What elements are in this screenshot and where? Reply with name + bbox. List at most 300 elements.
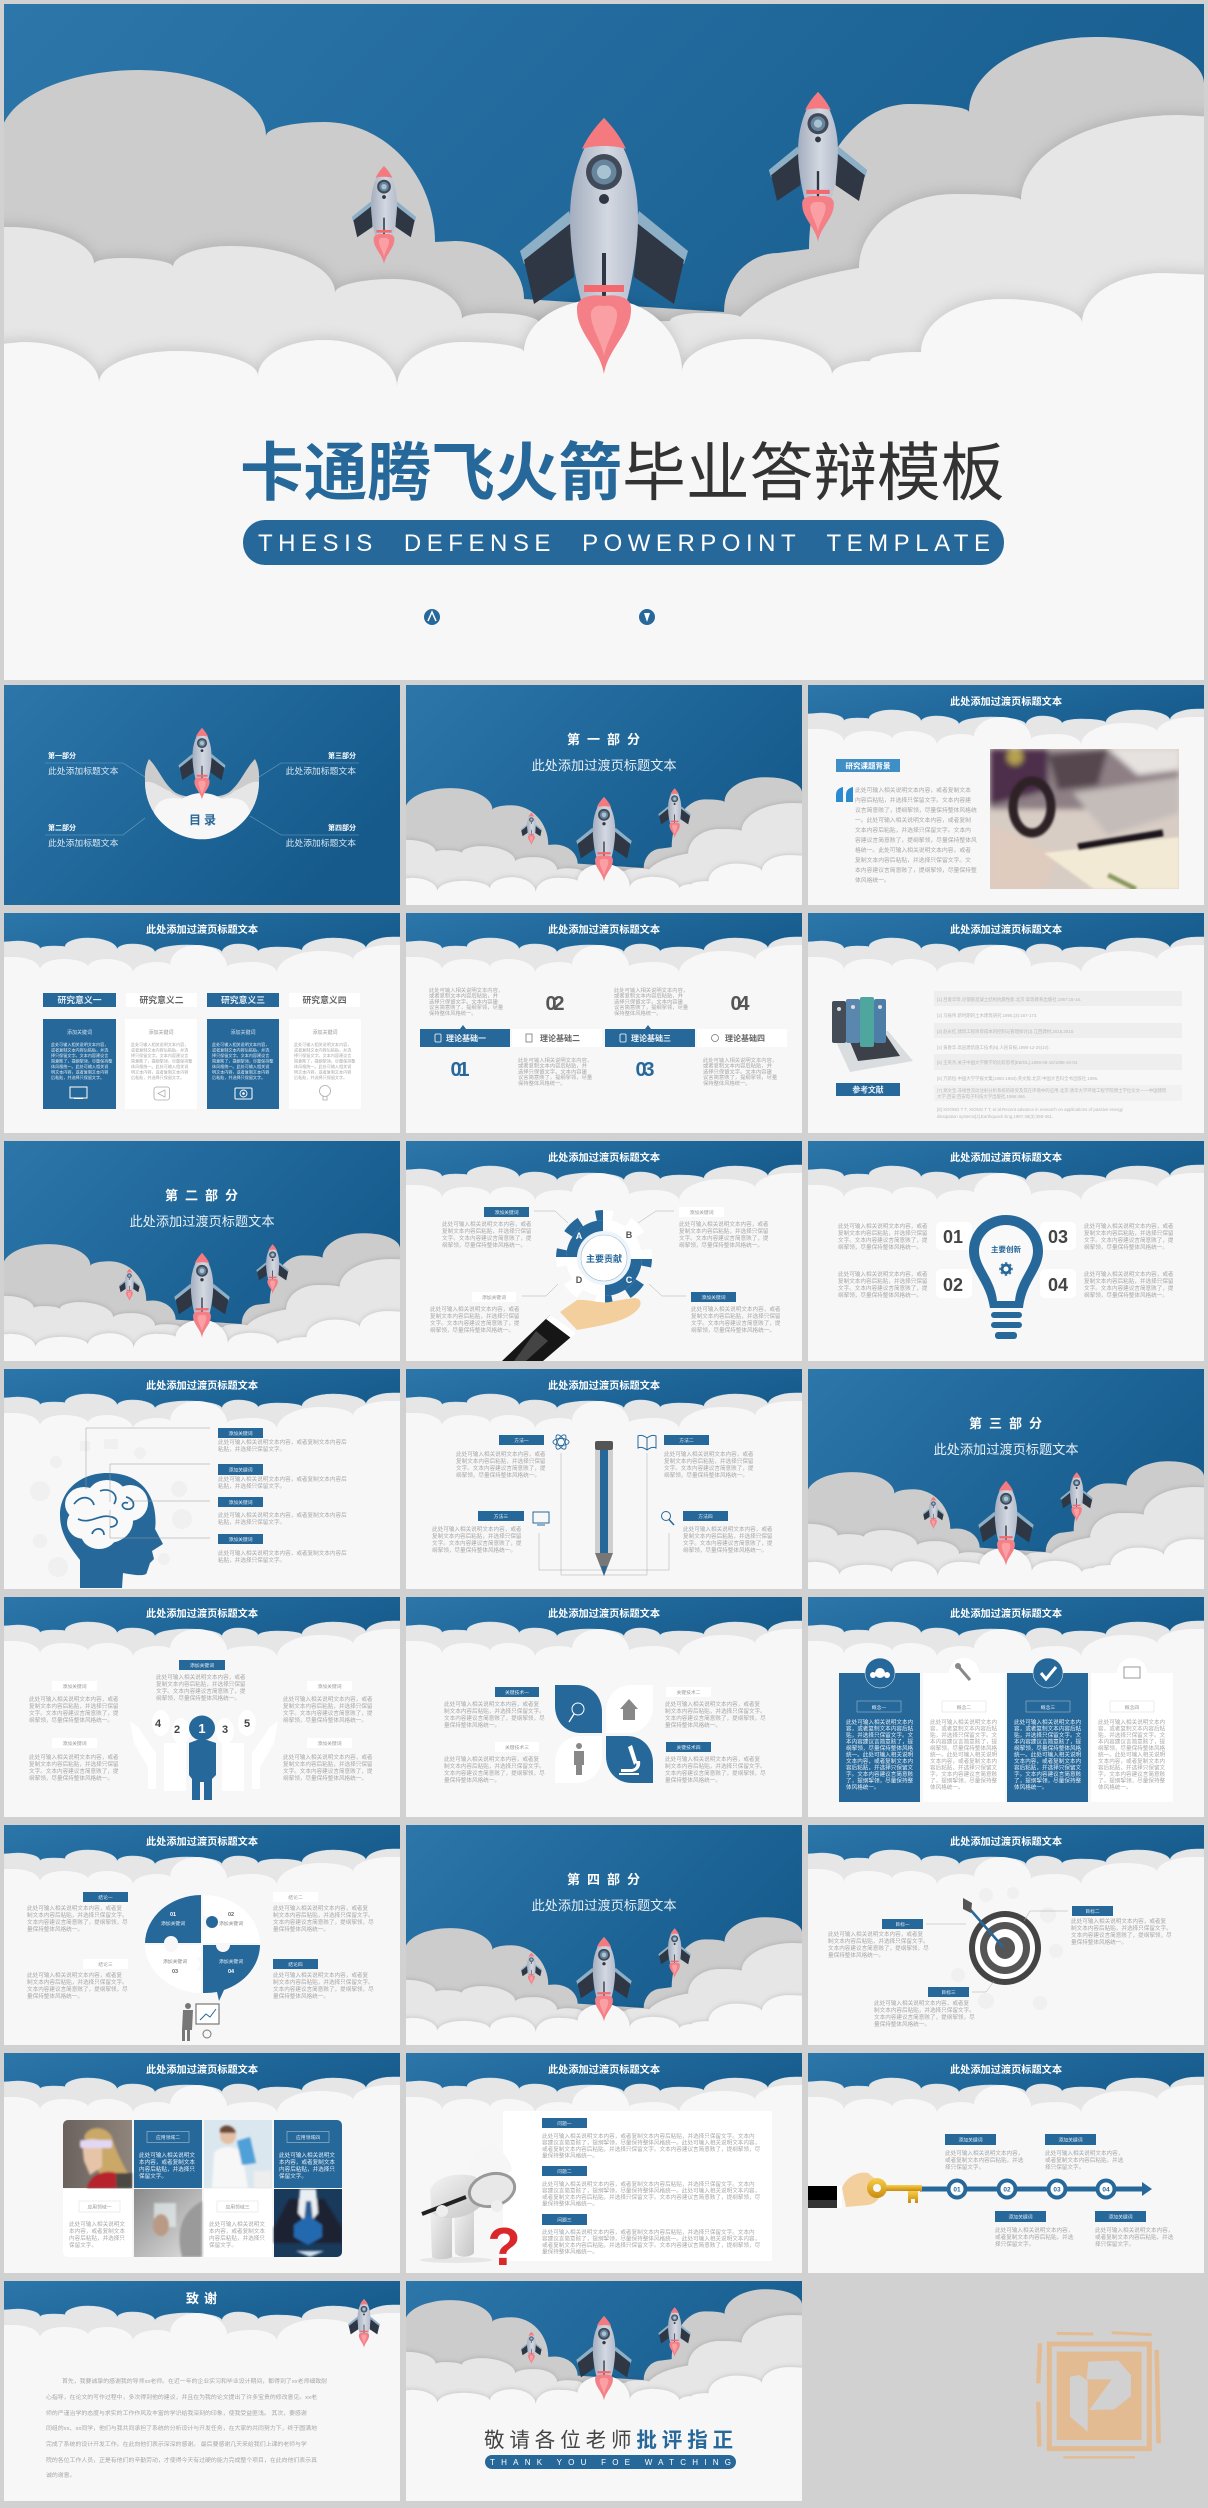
technology one: 量保持整体风格统一。 (444, 1721, 500, 1729)
panel: table of contents (4, 685, 400, 905)
card one: 体风格统一。此处可输入相关说 (51, 1063, 108, 1069)
conclusion two: 此处可输入相关说明文本内容，或者复 (273, 1904, 369, 1912)
method one: 方法一 (514, 1437, 529, 1444)
method four (683, 1511, 773, 1554)
cell: field four: 应用领域四 (296, 2134, 320, 2141)
timeline nodes: 04 (1102, 2186, 1110, 2194)
keyword two: 此处可输入相关说明文本内容， (995, 2226, 1073, 2234)
photo: woman with headset (63, 2120, 132, 2188)
numbers: 01 (943, 1227, 963, 1247)
keyword two: 或者复制文本内容后粘贴，并选 (995, 2233, 1074, 2241)
card one: 容，或者复制文本内容后粘 (846, 1724, 914, 1732)
conclusion one: 此处可输入相关说明文本内容，或者复 (27, 1904, 123, 1912)
number 01: 01 (450, 1059, 470, 1081)
method three: 复制文本内容后粘贴，并选择只保留 (432, 1532, 522, 1540)
card one: 贴，并选择只保留文字。文 (846, 1731, 914, 1739)
thank you paragraph: 诚的谢意。 (46, 2471, 75, 2479)
card one: 简意赅了，提纲挈领，尽量保持整 (51, 1058, 112, 1064)
keyword one: 添加关键词 (958, 2136, 983, 2144)
card four: 体风格统一。 (1098, 1783, 1132, 1791)
card three: 后粘贴，并选择只保留文字。 (212, 1074, 265, 1080)
number tiles (936, 1222, 1076, 1298)
method one (456, 1435, 546, 1479)
card two: 字。文本内容建议言简意赅 (930, 1770, 998, 1778)
technology one: 文本内容建议言简意赅了，提纲挈领，尽 (444, 1714, 545, 1722)
card two: 概念二 (957, 1704, 971, 1711)
icon: magnifier (662, 1512, 674, 1525)
keyword three (1045, 2134, 1124, 2171)
item three (218, 1497, 347, 1526)
card three: 文本内容，或者复制文本内 (1014, 1757, 1082, 1765)
conclusion three: 此处可输入相关说明文本内容，或者复 (27, 1971, 123, 1979)
method three: 方法三 (494, 1513, 508, 1520)
cell: field four: 此处可输入相关说明文 (279, 2151, 335, 2159)
card three (1007, 1658, 1088, 1802)
icon: book (638, 1435, 656, 1450)
keyword C with text: 纲挈领，尽量保持整体风格统一。 (691, 1326, 775, 1334)
petal top right (606, 1685, 653, 1733)
cell: field three (204, 2189, 272, 2257)
technology three (444, 1742, 545, 1784)
tab one: 研究意义一 (58, 994, 102, 1005)
right keyword top: 此处可输入相关说明文本内容，或者 (283, 1695, 373, 1703)
centre keyword: 纲挈领，尽量保持整体风格统一。 (156, 1694, 240, 1702)
heading: 此处添加过渡页标题文本 (548, 1607, 660, 1620)
reference list: [4] 黄春华.高层建筑施工技术[N].人民日报,1998-12-25(10). (937, 1044, 1050, 1051)
photo: scientist (204, 2120, 272, 2188)
section heading: 第一部分 (567, 732, 647, 747)
item four: 粘贴，并选择只保留文字。 (218, 1556, 285, 1564)
method two: 方法二 (679, 1437, 694, 1444)
question three: 容建议言简意赅了，提纲挈领，尽量保持整体风格统一。此处可输入相关说明文本内容， (542, 2234, 760, 2242)
card three: 添加关键词 (230, 1029, 256, 1036)
right keyword bottom: 复制文本内容后粘贴，并选择只保留 (283, 1760, 373, 1768)
card two: 明文本内容，或者复制文本内容 (131, 1068, 188, 1074)
illustration: binders on a laptop (832, 997, 913, 1072)
method three: 此处可输入相关说明文本内容，或者 (432, 1525, 522, 1533)
question mark: ? (488, 2217, 520, 2277)
timeline nodes: 01 (953, 2186, 961, 2194)
left keyword bottom (29, 1738, 119, 1782)
card two: 了，提纲挈领，尽量保持整 (930, 1776, 998, 1784)
card three: 字。文本内容建议言简意赅 (1014, 1770, 1082, 1778)
goal one: 量保持整体风格统一。 (828, 1951, 884, 1959)
heading: 此处添加过渡页标题文本 (548, 923, 660, 936)
closing message: 敬请各位老师批评指正 (484, 2429, 738, 2452)
keyword D with text: 文字。文本内容建议言简意赅了，提 (430, 1319, 520, 1327)
white figure with magnifier (420, 2145, 518, 2263)
card two: 文本内容，或者复制文本内 (930, 1757, 998, 1765)
item two (45, 818, 145, 848)
goal three: 此处可输入相关说明文本内容，或者复 (874, 1999, 970, 2007)
pencil (595, 1441, 613, 1576)
panel: concept cards (808, 1597, 1204, 1817)
numbers: 03 (1048, 1227, 1068, 1247)
question two: 或者复制文本内容后粘贴，并选择只保留文字。文本内容建议言简意赅了，提纲挈领，尽 (542, 2193, 761, 2201)
item four: 第四部分 (328, 823, 356, 832)
conclusion four: 制文本内容后粘贴，并选择只保留文字。 (273, 1978, 374, 1986)
figure numbers: 5 (244, 1718, 250, 1730)
goal three: 目标三 (941, 1989, 956, 1996)
card four: 统一。此处可输入相关说明 (1098, 1750, 1166, 1758)
method four: 此处可输入相关说明文本内容，或者 (683, 1525, 773, 1533)
method two: 文字。文本内容建议言简意赅了，提 (664, 1464, 754, 1472)
brain (65, 1480, 148, 1549)
label: 参考文献 (852, 1084, 884, 1094)
card four: 明文本内容，或者复制文本内容 (294, 1068, 351, 1074)
target (969, 1911, 1041, 1985)
gear diagram (556, 1210, 652, 1302)
keyword one: 择只保留文字。 (945, 2163, 984, 2171)
light bulb (969, 1215, 1043, 1339)
item one: 添加关键词 (228, 1430, 253, 1437)
text bottom right: 保持整体风格统一。 (703, 1079, 751, 1087)
arrow timeline (920, 2182, 1152, 2196)
conclusion one: 制文本内容后粘贴，并选择只保留文字。 (27, 1911, 128, 1919)
goal one: 目标一 (895, 1921, 910, 1928)
cell: field one (69, 2189, 132, 2248)
card four: 或者复制文本内容后粘贴，并选 (294, 1046, 351, 1052)
card two (125, 1019, 197, 1109)
hand with golden key (808, 2173, 922, 2208)
step one: 理论基础一 (446, 1033, 486, 1043)
step three (605, 1025, 695, 1047)
section heading: 第二部分 (165, 1188, 245, 1203)
method one: 此处可输入相关说明文本内容，或者 (456, 1450, 546, 1458)
reference list: [8] SOONG T T, XIONG T T, et al.Recent advance in research on applications of passive energy (937, 1107, 1124, 1112)
number 03: 03 (636, 1059, 654, 1081)
text three: 文字。文本内容建议言简意赅了，提 (1084, 1236, 1174, 1244)
technology two: 制文本内容后粘贴，并选择只保留文字。 (665, 1707, 766, 1715)
card two: 本内容建议言简意赅了，提 (930, 1738, 998, 1746)
cell: field three: 内容后粘贴，并选择只 (209, 2234, 265, 2242)
quote mark (836, 787, 853, 802)
item four: 添加关键词 (228, 1536, 253, 1543)
keyword A with text: 纲挈领，尽量保持整体风格统一。 (442, 1241, 526, 1249)
keyword D with text: 纲挈领，尽量保持整体风格统一。 (430, 1326, 514, 1334)
card three: 此处可输入相关说明文本内 (1014, 1718, 1082, 1726)
petal top left (555, 1685, 602, 1733)
item three: 第三部分 (328, 751, 356, 760)
item one: 此处添加标题文本 (48, 765, 119, 776)
paragraph: 复制文本内容后粘贴，并选择只保留文字。文 (855, 856, 971, 864)
centre keyword: 复制文本内容后粘贴，并选择只保留 (156, 1680, 246, 1688)
text four: 文字。文本内容建议言简意赅了，提 (1084, 1284, 1174, 1292)
brain folds (74, 1490, 134, 1535)
card one: 字。文本内容建议言简意赅 (846, 1770, 914, 1778)
cell: field three: 本内容，或者复制文本 (209, 2227, 265, 2235)
conclusion four: 结论四 (288, 1961, 303, 1968)
petal bottom right (606, 1736, 653, 1783)
goal two: 此处可输入相关说明文本内容，或者复 (1071, 1917, 1167, 1925)
keyword two: 添加关键词 (1008, 2214, 1033, 2220)
cell: field two (134, 2120, 202, 2188)
numbers: 02 (943, 1275, 963, 1295)
card four: 添加关键词 (312, 1029, 338, 1036)
technology one: 此处可输入相关说明文本内容，或者复 (444, 1700, 540, 1708)
card four: 文本内容，或者复制文本内 (1098, 1757, 1166, 1765)
label (836, 1083, 900, 1096)
card one: 择只保留文字。文本内容建议言 (51, 1052, 108, 1058)
card one: 文本内容，或者复制文本内 (846, 1757, 914, 1765)
left keyword top: 添加关键词 (62, 1683, 87, 1690)
card three: 容，或者复制文本内容后粘 (1014, 1724, 1082, 1732)
method three: 文字。文本内容建议言简意赅了，提 (432, 1539, 522, 1547)
keyword A with text: 此处可输入相关说明文本内容，或者 (442, 1220, 532, 1228)
section heading: 第四部分 (567, 1872, 647, 1887)
group of people figures (130, 1710, 278, 1791)
centre keyword: 添加关键词 (190, 1662, 214, 1669)
puzzle labels: 添加关键词 (219, 1920, 243, 1927)
card four: 此处可输入相关说明文本内容， (294, 1041, 351, 1047)
puzzle labels: 添加关键词 (161, 1920, 185, 1927)
item one: 此处可输入相关说明文本内容，或者复制文本内容后 (218, 1438, 347, 1446)
panel: section four (406, 1825, 802, 2045)
card three: 本内容建议言简意赅了，提 (1014, 1738, 1082, 1746)
faint background icons (951, 1887, 1063, 2010)
text bottom left: 或者复制文本内容后粘贴，并 (518, 1062, 588, 1070)
text four: 纲挈领，尽量保持整体风格统一。 (1084, 1291, 1168, 1299)
card three (207, 1019, 279, 1109)
cell: field two: 此处可输入相关说明文 (139, 2151, 195, 2159)
label (836, 759, 900, 772)
conclusion three: 结论三 (98, 1961, 113, 1968)
goal two: 目标二 (1085, 1908, 1100, 1915)
card two: 简意赅了，提纲挈领，尽量保持整 (131, 1058, 192, 1064)
method one: 复制文本内容后粘贴，并选择只保留 (456, 1457, 546, 1465)
right keyword top: 复制文本内容后粘贴，并选择只保留 (283, 1702, 373, 1710)
reference list: 大学,西安:西安电子科技大学出版社,1996:466. (937, 1093, 1026, 1100)
card one: 概念一 (872, 1704, 886, 1711)
heading: 此处添加过渡页标题文本 (548, 1151, 660, 1164)
puzzle labels: 添加关键词 (219, 1958, 243, 1965)
question three: 此处可输入相关说明文本内容，或者复制文本内容后粘贴，并选择只保留文字。文本内 (542, 2228, 755, 2236)
technology three: 量保持整体风格统一。 (444, 1776, 500, 1784)
keyword C with text (649, 1284, 781, 1334)
card four: 本内容建议言简意赅了，提 (1098, 1738, 1166, 1746)
watermark stamp (1038, 2333, 1159, 2457)
numbers (943, 1227, 1068, 1295)
thank you paragraph: 完成了系统的设计开发工作。在此向他们表示深深的感谢。 最后要感谢几天来给我们上课的老师与学 (46, 2440, 307, 2448)
keyword three: 或者复制文本内容后粘贴，并选 (1045, 2156, 1124, 2164)
centre keyword: 文字。文本内容建议言简意赅了，提 (156, 1687, 246, 1695)
technology four: 关键技术四 (676, 1744, 701, 1751)
text top left: 保持整体风格统一。 (429, 1009, 477, 1017)
text bottom left: 保持整体风格统一。 (518, 1079, 566, 1087)
thank you paragraph: 心指导，在论文的写作过程中，多次得到他的建议，并且在为我的论文提出了许多宝贵的修改意见。xx老 (46, 2393, 317, 2401)
card four (1091, 1658, 1173, 1802)
presenter with chart (182, 2003, 219, 2041)
conclusion two: 量保持整体风格统一。 (273, 1925, 329, 1933)
keyword C with text: 文字。文本内容建议言简意赅了，提 (691, 1319, 781, 1327)
card three: 纲挈领，尽量保持整体风格 (1014, 1744, 1082, 1752)
tab four: 研究意义四 (302, 994, 347, 1005)
icon: advisor badge (639, 609, 655, 625)
subtitle pill: THESIS DEFENSE POWERPOINT TEMPLATE (258, 530, 990, 557)
question one: 量保持整体风格统一。 (542, 2152, 598, 2160)
card four: 贴，并选择只保留文字。文 (1098, 1731, 1166, 1739)
puzzle labels: 03 (172, 1969, 178, 1975)
item three (259, 751, 359, 777)
conclusion two: 结论二 (288, 1894, 303, 1901)
icon: monitor (533, 1512, 549, 1525)
conclusion three: 文本内容建议言简意赅了，提纲挈领，尽 (27, 1985, 128, 1993)
card four: 容，或者复制文本内容后粘 (1098, 1724, 1166, 1732)
right keyword top: 纲挈领，尽量保持整体风格统一。 (283, 1716, 367, 1724)
lead figure (189, 1716, 216, 1800)
text four: 此处可输入相关说明文本内容，或者 (1084, 1270, 1174, 1278)
paragraph: 体风格统一。 (855, 876, 890, 884)
panel: section one (406, 685, 802, 905)
heading: 此处添加过渡页标题文本 (950, 923, 1062, 936)
card two: 此处可输入相关说明文本内 (930, 1718, 998, 1726)
goal two: 量保持整体风格统一。 (1071, 1938, 1127, 1946)
card two: 容后粘贴，并选择只保留文 (930, 1764, 998, 1772)
cell: field one: 保留文字。 (69, 2241, 97, 2249)
card two: 容，或者复制文本内容后粘 (930, 1724, 998, 1732)
puzzle labels: 02 (228, 1912, 234, 1918)
thanks pill: THANK YOU FOE WATCHING (490, 2458, 731, 2467)
paragraph: 容建议言简意赅了，提纲挈领，尽量保持整体风 (855, 836, 977, 844)
method two: 纲挈领，尽量保持整体风格统一。 (664, 1471, 748, 1479)
heading: 此处添加过渡页标题文本 (950, 2063, 1062, 2076)
heading: 致谢 (186, 2291, 222, 2306)
text four: 复制文本内容后粘贴，并选择只保留 (1084, 1277, 1174, 1285)
thank you paragraph: 师的严谨治学的态度与求实的工作作风及丰富的学识给我深刻的印象，使我受益匪浅。 其次，要感谢 (46, 2409, 307, 2417)
method four: 文字。文本内容建议言简意赅了，提 (683, 1539, 773, 1547)
left keyword top: 纲挈领，尽量保持整体风格统一。 (29, 1716, 113, 1724)
label: 研究课题背景 (846, 760, 891, 770)
card two: 体风格统一。 (930, 1783, 964, 1791)
reference list: dissipation systems[J].Earthquack Eng,1997,38(3):358-361. (937, 1114, 1053, 1119)
card three: 贴，并选择只保留文字。文 (1014, 1731, 1082, 1739)
panel: open questions (406, 2053, 802, 2277)
reference list (934, 991, 1182, 1119)
keyword D with text: 复制文本内容后粘贴，并选择只保留 (430, 1312, 520, 1320)
left keyword bottom: 复制文本内容后粘贴，并选择只保留 (29, 1760, 119, 1768)
conclusion four: 文本内容建议言简意赅了，提纲挈领，尽 (273, 1985, 374, 1993)
item one (218, 1428, 347, 1453)
figure numbers: 1 (198, 1721, 206, 1736)
keyword three: 择只保留文字。 (1045, 2163, 1084, 2171)
panel: goals target (808, 1825, 1204, 2045)
illustration: clouds and rockets (401, 1917, 805, 2156)
heading: 此处添加过渡页标题文本 (548, 1379, 660, 1392)
text three: 复制文本内容后粘贴，并选择只保留 (1084, 1229, 1174, 1237)
icon: gear (999, 1262, 1013, 1276)
step two: 理论基础二 (540, 1033, 580, 1043)
question one: 问题一 (557, 2120, 572, 2127)
goal three (874, 1981, 994, 2028)
card four: 字。文本内容建议言简意赅 (1098, 1770, 1166, 1778)
section heading: 第三部分 (969, 1416, 1049, 1431)
cell: field one: 此处可输入相关说明文 (69, 2220, 125, 2228)
timeline nodes: 02 (1003, 2186, 1011, 2194)
icon: atom (553, 1433, 569, 1451)
card four: 择只保留文字。文本内容建议言 (294, 1052, 351, 1058)
text top left: 选择只保留文字。文本内容建 (429, 997, 499, 1005)
keyword C with text: 复制文本内容后粘贴，并选择只保留 (691, 1312, 781, 1320)
cell: field two: 应用领域二 (156, 2134, 180, 2141)
panel: closing slide (406, 2281, 802, 2501)
heading: 此处添加过渡页标题文本 (548, 2063, 660, 2076)
item three: 此处添加标题文本 (286, 765, 356, 776)
text bottom right: 此处可输入相关说明文本内容， (703, 1056, 777, 1064)
right keyword top: 文字。文本内容建议言简意赅了，提 (283, 1709, 373, 1717)
card three: 容后粘贴，并选择只保留文 (1014, 1764, 1082, 1772)
right keyword top (283, 1681, 373, 1724)
question two (542, 2166, 761, 2208)
text top right: 议言简意赅了，提纲挈领，尽量 (614, 1003, 689, 1011)
technology four: 量保持整体风格统一。 (665, 1776, 721, 1784)
cell: field four: 内容后粘贴，并选择只 (279, 2165, 335, 2173)
text top right: 或者复制文本内容后粘贴，并 (614, 992, 684, 1000)
reference list: [7] 郑文宝.非线性流动注射分析系统的研究及其在环境中的应用.北京:清华大学环境工程学院博士学位论文——中国建筑 (937, 1087, 1167, 1094)
item three: 粘贴，并选择只保留文字。 (218, 1518, 285, 1526)
cell: field three: 保留文字。 (209, 2241, 237, 2249)
illustration: clouds and rockets (401, 777, 805, 1016)
numbers: 04 (1048, 1275, 1068, 1295)
paragraph: 议言简意赅了，提纲挈领，尽量保持整体风格统 (855, 806, 977, 814)
photo: businessman with data (274, 2189, 342, 2257)
item four: 此处添加标题文本 (286, 837, 356, 848)
keyword three: 此处可输入相关说明文本内容， (1045, 2149, 1123, 2157)
head silhouette (60, 1473, 163, 1588)
figure numbers (155, 1718, 250, 1736)
panel: acknowledgements (4, 2281, 400, 2501)
rocket (178, 728, 226, 800)
left keyword top (29, 1681, 119, 1724)
illustration: clouds and three rockets (0, 37, 1208, 760)
card four: 体风格统一。此处可输入相关说 (294, 1063, 351, 1069)
keyword B with text: 此处可输入相关说明文本内容，或者 (679, 1220, 769, 1228)
goal two: 制文本内容后粘贴，并选择只保留文字。 (1071, 1924, 1172, 1932)
cell: field two: 内容后粘贴，并选择只 (139, 2165, 195, 2173)
keyword A with text: 复制文本内容后粘贴，并选择只保留 (442, 1227, 532, 1235)
text one: 此处可输入相关说明文本内容，或者 (838, 1222, 928, 1230)
contents title: 目录 (189, 813, 219, 827)
goal three: 制文本内容后粘贴，并选择只保留文字。 (874, 2006, 975, 2014)
cell: field one: 内容后粘贴，并选择只 (69, 2234, 125, 2242)
thank you paragraph: 同组的xx、xx同学，他们与我共同承担了系统的分析设计与开发任务，在大家的共同努力下，终于圆满地 (46, 2424, 317, 2432)
conclusion four (273, 1959, 374, 2000)
card one: 统一。此处可输入相关说明 (846, 1750, 914, 1758)
heading: 此处添加过渡页标题文本 (146, 923, 258, 936)
number 04: 04 (730, 993, 750, 1015)
question three: 或者复制文本内容后粘贴，并选择只保留文字。文本内容建议言简意赅了，提纲挈领，尽 (542, 2241, 761, 2249)
technology two: 此处可输入相关说明文本内容，或者复 (665, 1700, 761, 1708)
conclusion one: 量保持整体风格统一。 (27, 1925, 83, 1933)
text two: 此处可输入相关说明文本内容，或者 (838, 1270, 928, 1278)
keyword D with text (430, 1284, 558, 1334)
item three: 此处可输入相关说明文本内容，或者复制文本内容后 (218, 1511, 347, 1519)
card three: 择只保留文字。文本内容建议言 (212, 1052, 269, 1058)
card four: 容后粘贴，并选择只保留文 (1098, 1764, 1166, 1772)
tab two (126, 993, 197, 1007)
card one (839, 1658, 920, 1802)
question two: 量保持整体风格统一。 (542, 2200, 598, 2208)
conclusion four: 此处可输入相关说明文本内容，或者复 (273, 1971, 369, 1979)
method two (664, 1435, 754, 1479)
card three: 体风格统一。 (1014, 1783, 1048, 1791)
panel: theoretical basis (406, 913, 802, 1133)
tab three: 研究意义三 (221, 994, 265, 1005)
step four: 理论基础四 (725, 1033, 765, 1043)
question two: 问题二 (557, 2168, 572, 2175)
card two: 或者复制文本内容后粘贴，并选 (131, 1046, 188, 1052)
cell: field one: 应用领域一 (88, 2204, 112, 2210)
panel: puzzle conclusions (4, 1825, 400, 2045)
